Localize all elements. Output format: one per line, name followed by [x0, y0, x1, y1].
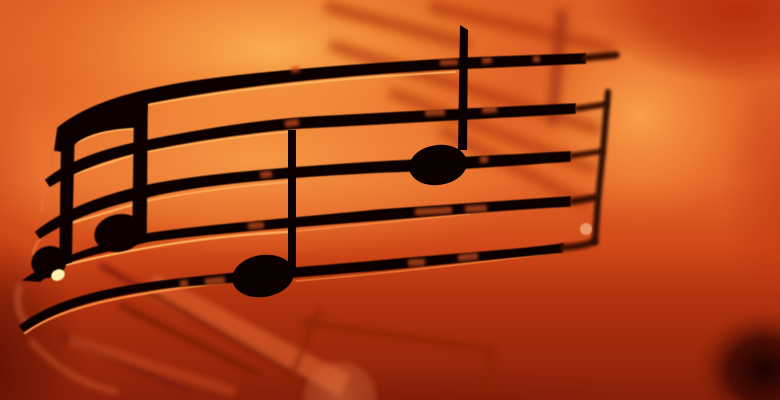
note 4 with stem	[406, 25, 470, 189]
copper glints on staff lines	[180, 59, 540, 284]
music staff	[20, 25, 616, 331]
staff line 5	[20, 244, 563, 331]
staff line 4	[24, 197, 570, 281]
reflected note glow	[300, 358, 380, 400]
staff line 1 and beam	[55, 54, 585, 152]
left stem 1	[60, 128, 74, 264]
staff line 2	[46, 104, 575, 186]
note head 1, far left	[28, 242, 70, 282]
staff line 3 fading end	[570, 151, 604, 156]
left stem 2	[133, 96, 147, 240]
staff line 3	[36, 152, 570, 238]
bright specular spot	[49, 267, 67, 283]
dark corner shadow	[680, 300, 780, 400]
note head 2	[92, 210, 146, 256]
staff line 5 fading end	[560, 240, 596, 248]
staff line 2 fading end	[575, 104, 608, 109]
small bead at right	[580, 223, 592, 235]
staff line 1 fading end	[585, 55, 616, 58]
staff line 4 fading end	[570, 197, 598, 202]
note 3 with stem	[229, 130, 297, 302]
small staff reflections at left edge	[33, 128, 70, 255]
right end bar	[595, 92, 608, 242]
blurred staff shadow, upper right	[325, 6, 615, 205]
staff bright edge highlights	[25, 72, 560, 333]
blurred reflection, lower left	[18, 265, 492, 394]
